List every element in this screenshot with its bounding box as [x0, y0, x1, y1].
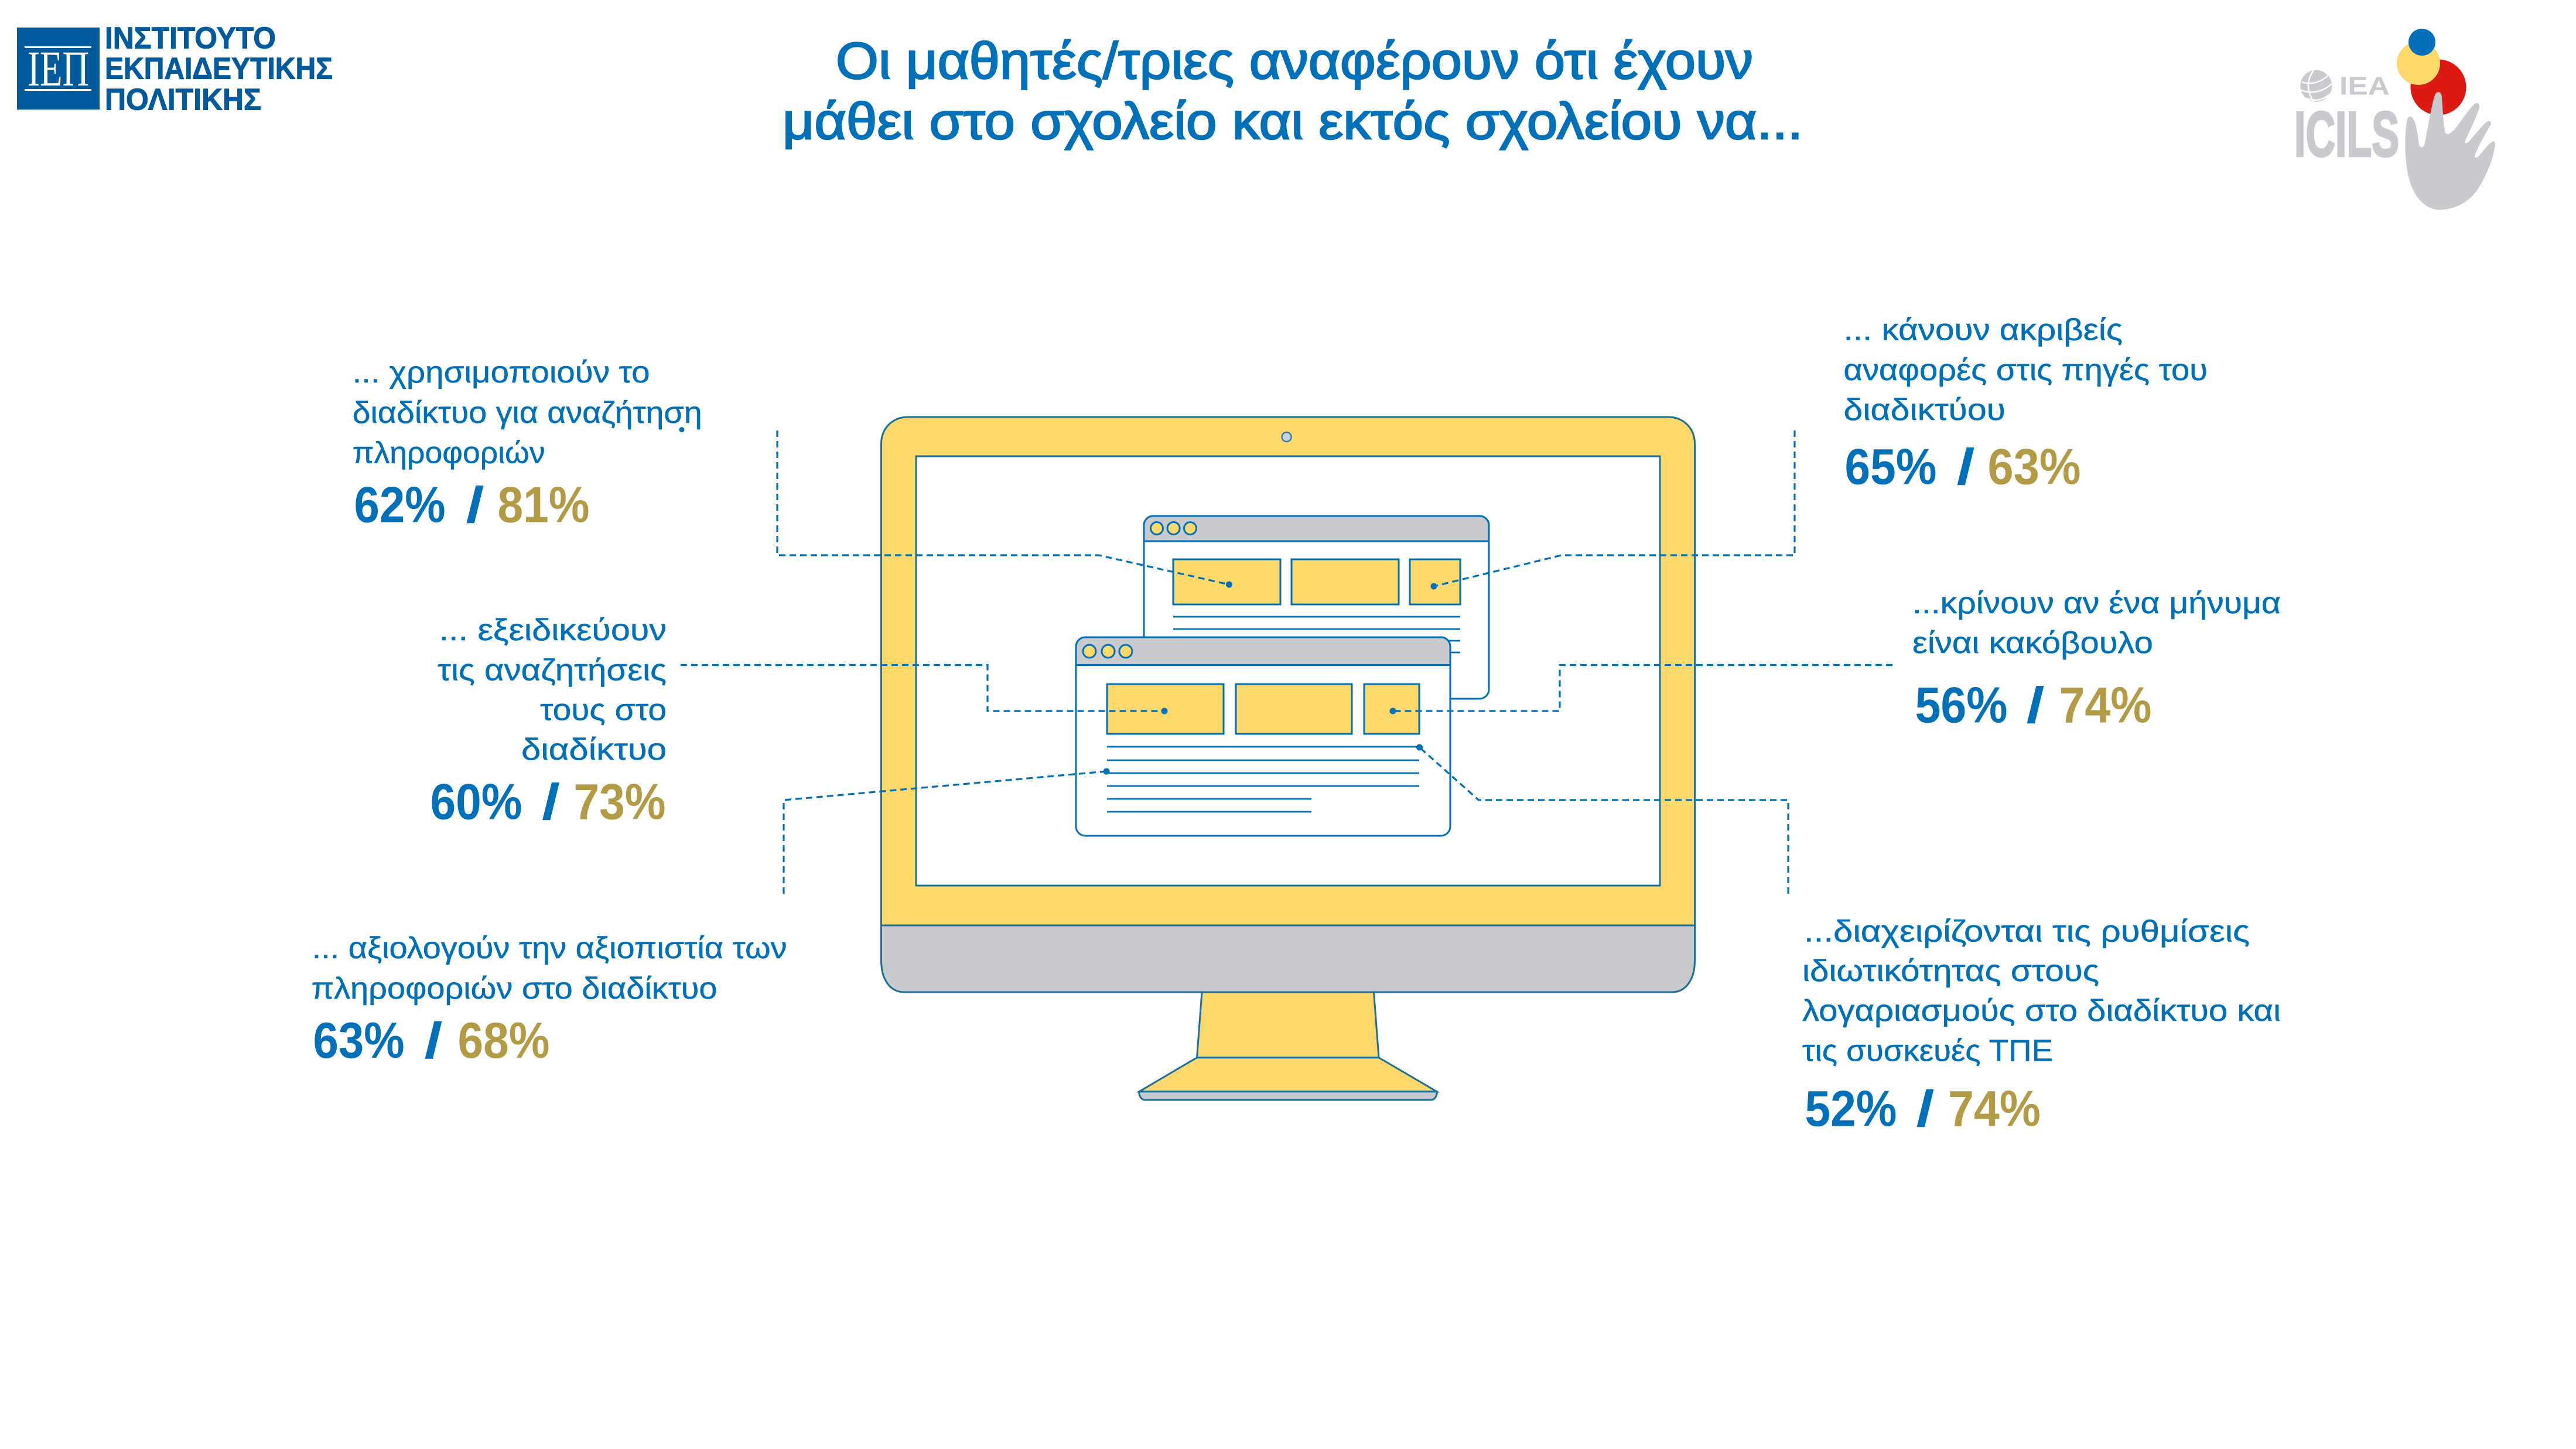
values: 65% / 63%: /	[1956, 439, 1975, 495]
text block: refine searches: ... εξειδικεύουν	[439, 613, 667, 647]
values: 60% / 73%: /	[542, 774, 560, 830]
values: 65% / 63%	[1845, 439, 2080, 495]
values: 62% / 81%	[354, 477, 589, 534]
logo: IEA ICILS	[2294, 29, 2495, 210]
values: 62% / 81%: /	[466, 477, 484, 534]
values: 52% / 74%: 52%	[1805, 1081, 1897, 1137]
text block: accurate references: διαδικτύου	[1844, 393, 2006, 427]
values: 62% / 81%: 62%	[354, 477, 445, 534]
values: 65% / 63%: 63%	[1988, 439, 2080, 495]
values: 63% / 68%	[313, 1013, 549, 1069]
logo wordmark: ΠΟΛΙΤΙΚΗΣ	[105, 82, 261, 116]
values: 56% / 74%: 56%	[1915, 678, 2008, 734]
text block: malicious message: ...κρίνουν αν ένα μήνυμα	[1912, 586, 2281, 620]
values: 63% / 68%: /	[424, 1013, 443, 1069]
values: 63% / 68%: 68%	[458, 1013, 549, 1069]
text block: evaluate credibility: ... αξιολογούν την αξιοπιστία των	[312, 931, 787, 965]
values: 62% / 81%: 81%	[498, 477, 589, 534]
values: 52% / 74%: 74%	[1948, 1081, 2041, 1137]
connector: accurate references	[1430, 430, 1795, 589]
logo mark: IEP: ΙΕΠ	[28, 40, 89, 97]
text block: internet search: πληροφοριών	[353, 436, 545, 470]
IEA wordmark: IEA	[2339, 72, 2390, 101]
values: 56% / 74%	[1915, 678, 2152, 734]
text block: evaluate credibility	[312, 931, 787, 1069]
text block: privacy settings: τις συσκευές ΤΠΕ	[1802, 1034, 2053, 1068]
title	[783, 32, 1803, 150]
connector: privacy settings	[1416, 744, 1788, 894]
computer monitor	[881, 417, 1695, 1100]
title: Οι μαθητές/τριες αναφέρουν ότι έχουν	[836, 32, 1753, 90]
icon: globe	[2300, 70, 2332, 102]
values: 52% / 74%	[1805, 1081, 2041, 1137]
text block: malicious message	[1912, 586, 2281, 734]
text block: accurate references	[1844, 313, 2208, 495]
text block: refine searches: τις αναζητήσεις	[438, 654, 667, 688]
text block: accurate references: ... κάνουν ακριβείς	[1844, 313, 2123, 347]
back browser window	[1144, 516, 1489, 699]
text block: internet search	[353, 356, 702, 534]
text block: internet search: διαδίκτυο για αναζήτηση	[353, 396, 702, 430]
logo: Institute of Educational Policy	[17, 20, 333, 116]
camera	[1282, 432, 1292, 442]
values: 56% / 74%: /	[2027, 678, 2045, 734]
text block: refine searches: τους στο	[540, 693, 667, 727]
connector: internet search	[777, 430, 1232, 588]
monitor chin	[881, 925, 1695, 992]
values: 60% / 73%	[430, 774, 665, 830]
text block: evaluate credibility: πληροφοριών στο διαδίκτυο	[312, 972, 717, 1006]
text block: malicious message: είναι κακόβουλο	[1912, 626, 2153, 660]
values: 52% / 74%: /	[1916, 1081, 1935, 1137]
text block: internet search: ... χρησιμοποιούν το	[353, 356, 650, 389]
title: μάθει στο σχολείο και εκτός σχολείου να...	[783, 92, 1803, 150]
text block: refine searches: διαδίκτυο	[521, 733, 667, 767]
values: 60% / 73%: 60%	[430, 774, 522, 830]
logo wordmark: ΕΚΠΑΙΔΕΥΤΙΚΗΣ	[105, 51, 333, 85]
logo wordmark: ΙΝΣΤΙΤΟΥΤΟ	[105, 20, 276, 54]
screen	[916, 456, 1660, 886]
monitor stand	[1139, 992, 1437, 1100]
connector: evaluate credibility	[784, 768, 1109, 894]
ICILS wordmark: ICILS	[2294, 99, 2399, 170]
text block: refine searches	[430, 613, 667, 830]
text block: privacy settings	[1802, 915, 2281, 1137]
text block: accurate references: αναφορές στις πηγές του	[1844, 353, 2208, 387]
values: 63% / 68%: 63%	[313, 1013, 404, 1069]
values: 65% / 63%: 65%	[1845, 439, 1936, 495]
icon: hand	[2405, 92, 2495, 210]
text block: privacy settings: ...διαχειρίζονται τις ρυθμίσεις	[1804, 915, 2250, 949]
text block: privacy settings: ιδιωτικότητας στους	[1802, 954, 2099, 988]
front browser window	[1076, 637, 1450, 836]
monitor frame	[881, 417, 1695, 925]
connector: refine searches	[681, 665, 1168, 715]
logo wordmark	[105, 20, 333, 116]
logo mark: IEP	[17, 28, 100, 110]
connector: malicious message	[1389, 665, 1892, 715]
values: 56% / 74%: 74%	[2059, 678, 2152, 734]
icon: circles	[2397, 29, 2466, 115]
text block: privacy settings: λογαριασμούς στο διαδίκτυο και	[1802, 994, 2281, 1028]
values: 60% / 73%: 73%	[574, 774, 665, 830]
